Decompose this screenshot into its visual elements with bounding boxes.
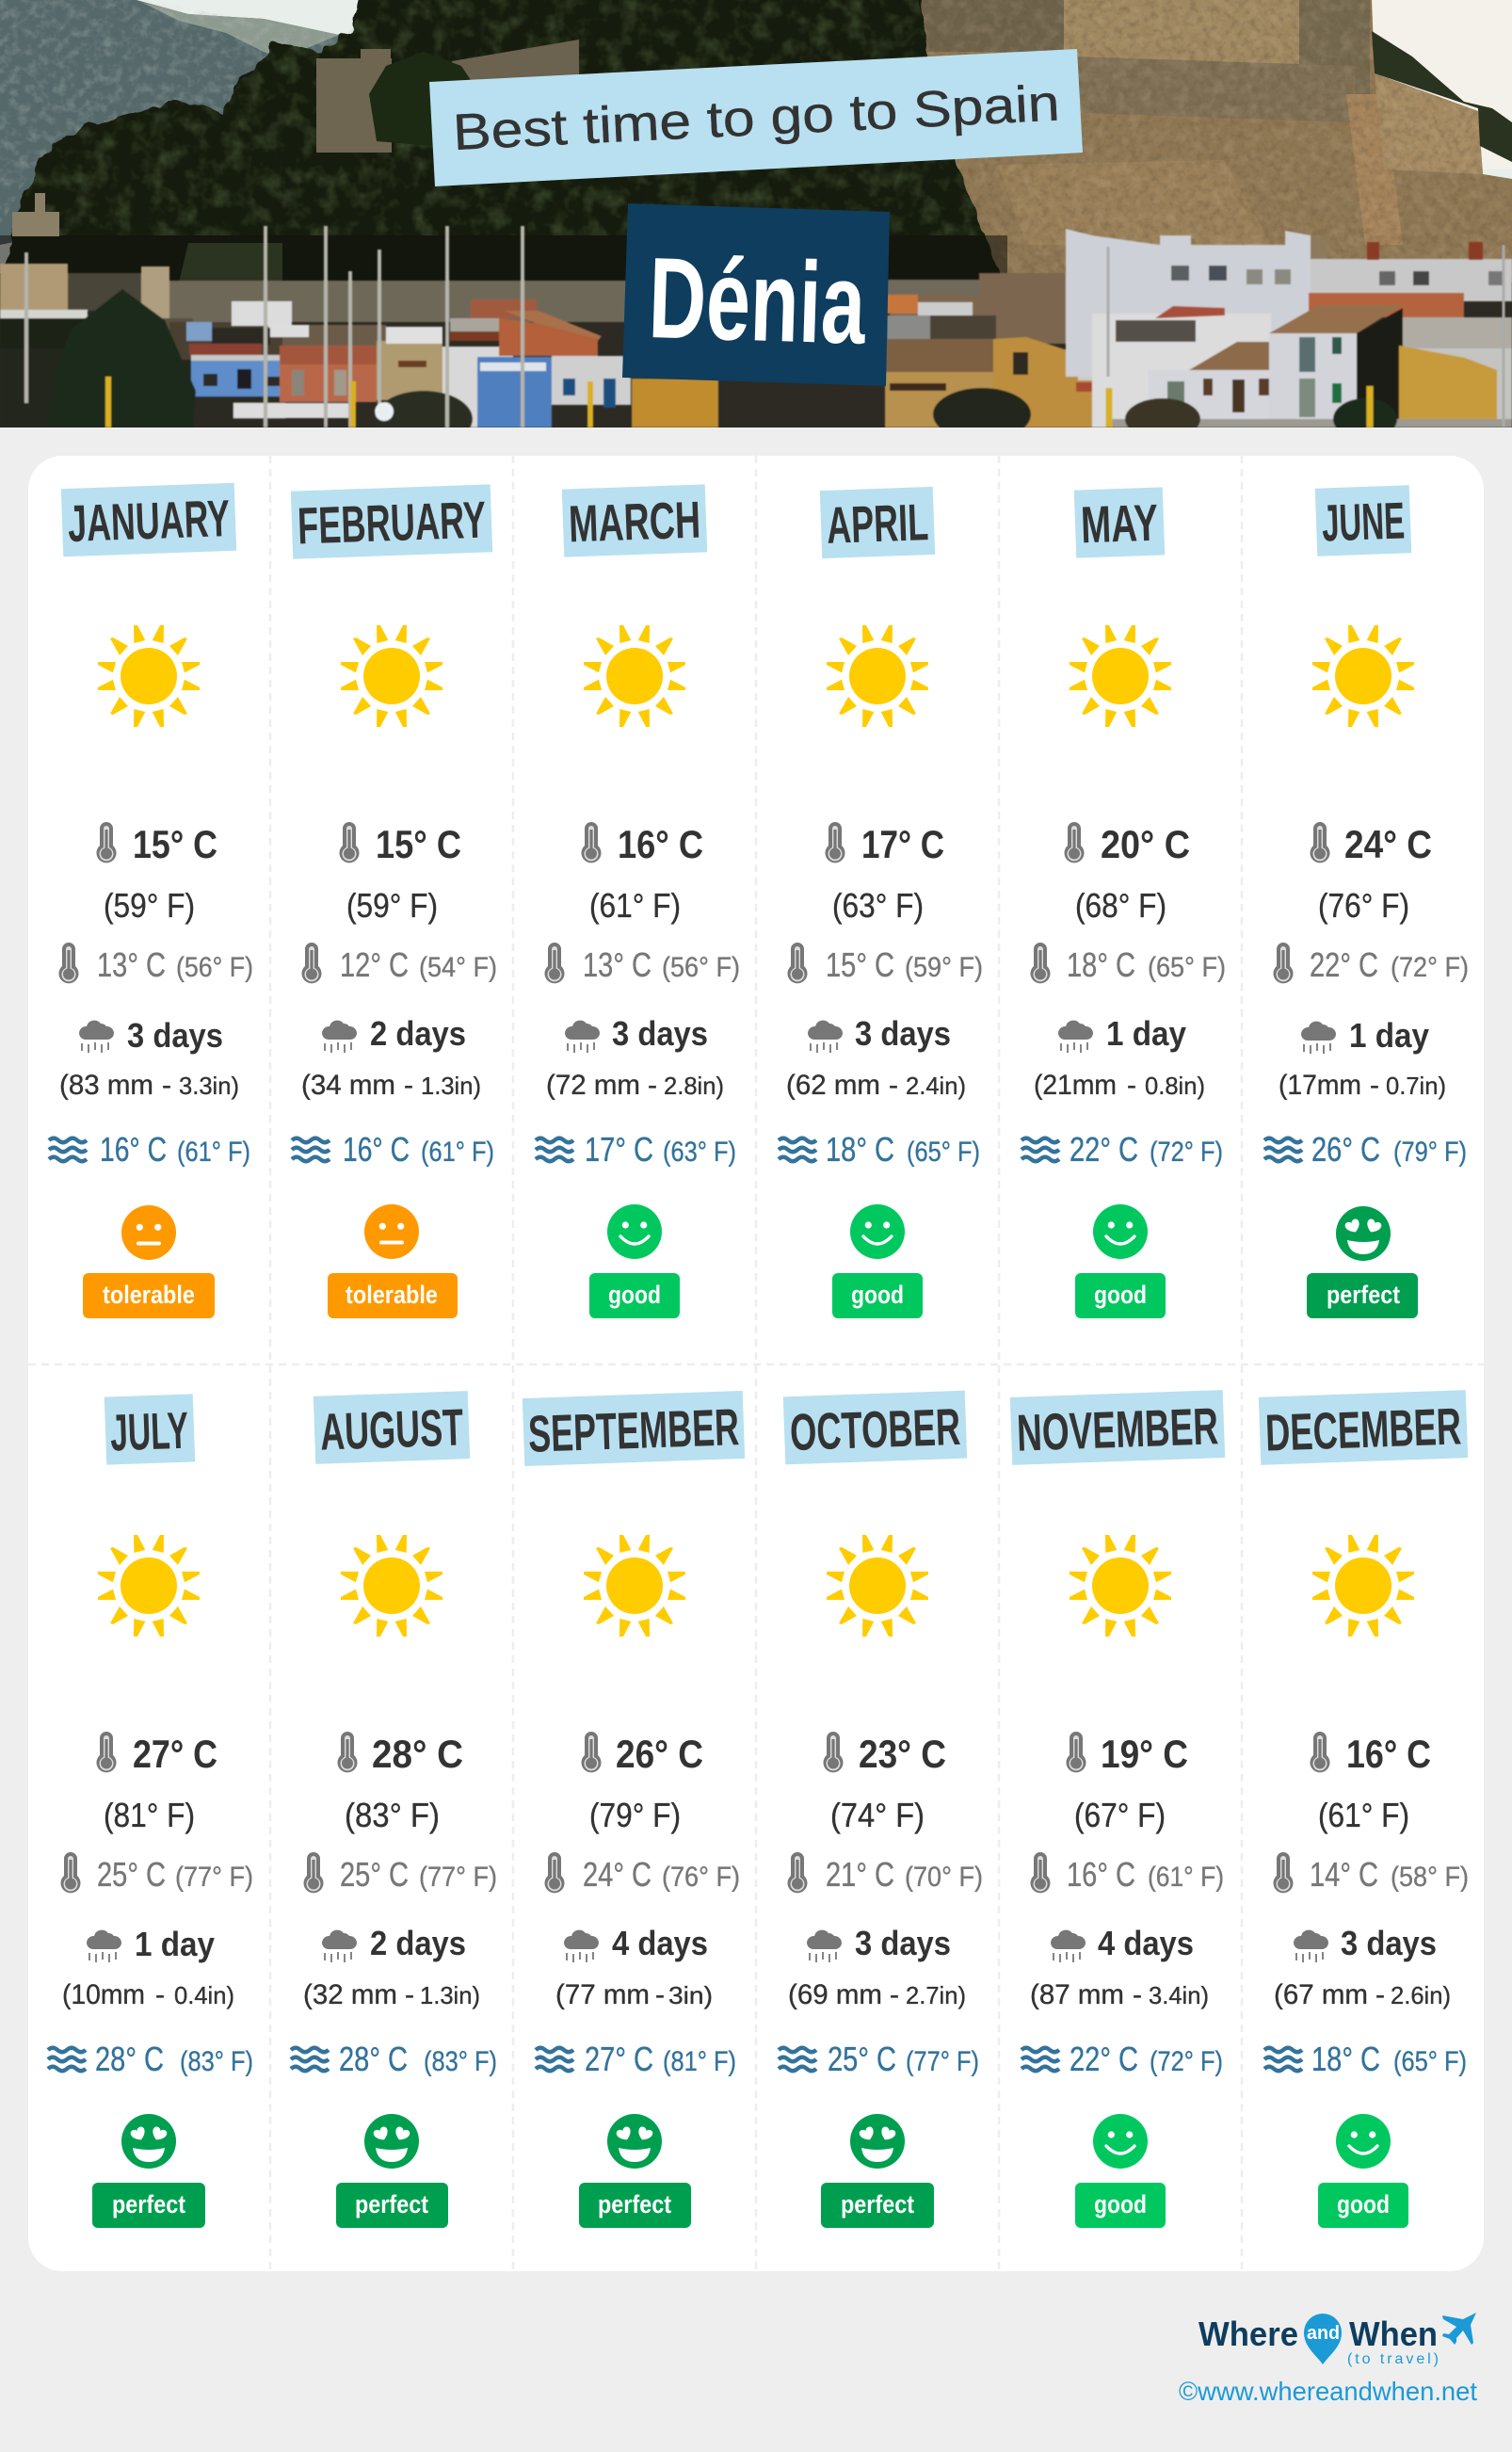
rainy days xyxy=(1294,1924,1437,1962)
rating: tolerable: tolerable xyxy=(103,1281,195,1309)
rainy days xyxy=(807,1924,951,1962)
icon: sun xyxy=(341,1535,442,1637)
sea temperature: (72° F) xyxy=(1150,2046,1223,2077)
rainy days: 3 days xyxy=(855,1014,951,1053)
logo: Where and When: Where xyxy=(1198,2315,1298,2353)
low temperature: (72° F) xyxy=(1391,952,1469,983)
rating: tolerable: tolerable xyxy=(346,1281,438,1309)
high temperature xyxy=(339,822,461,866)
high temperature xyxy=(582,1732,703,1776)
month label xyxy=(1074,487,1165,558)
sea temperature: 16° C xyxy=(100,1130,167,1169)
rainfall: (72 mm xyxy=(546,1070,640,1101)
rainfall: - xyxy=(1127,1070,1136,1101)
sea temperature: 22° C xyxy=(1070,1130,1138,1169)
panel: September xyxy=(523,1391,745,2228)
rainfall: (87 mm xyxy=(1030,1979,1124,2010)
rainfall xyxy=(1274,1979,1451,2010)
month label xyxy=(1315,485,1411,557)
high temperature: 23° C xyxy=(859,1732,946,1776)
rainfall: 2.6in) xyxy=(1391,1981,1451,2009)
rainy days: 3 days xyxy=(855,1924,951,1962)
rainy days: 3 days xyxy=(127,1016,223,1055)
sea temperature xyxy=(1021,2040,1223,2078)
rainfall xyxy=(786,1070,966,1101)
rainfall: 2.7in) xyxy=(906,1981,966,2009)
icon: sun xyxy=(98,1535,200,1637)
month label: SEPTEMBER xyxy=(527,1397,740,1463)
rainfall: - xyxy=(404,1070,413,1101)
sea temperature: 16° C xyxy=(343,1130,410,1169)
rating: good: good xyxy=(851,1281,904,1309)
rainfall xyxy=(301,1070,481,1101)
panel: October xyxy=(779,1391,983,2228)
low temperature: (56° F) xyxy=(176,952,253,983)
sea temperature: (65° F) xyxy=(907,1137,980,1168)
month label: NOVEMBER xyxy=(1016,1396,1219,1462)
sea temperature: (72° F) xyxy=(1150,1137,1223,1168)
sea temperature: (61° F) xyxy=(421,1137,494,1168)
rating: good: good xyxy=(608,1281,661,1309)
rainfall: (69 mm xyxy=(788,1979,882,2010)
low temperature: 16° C xyxy=(1067,1855,1135,1894)
sea temperature xyxy=(1021,1130,1223,1169)
rainfall: - xyxy=(1375,1979,1385,2010)
sea temperature xyxy=(48,2040,253,2078)
low temperature: 18° C xyxy=(1067,945,1135,984)
low temperature xyxy=(301,943,497,984)
rainfall: - xyxy=(162,1070,171,1101)
rainy days xyxy=(1058,1014,1186,1053)
high temperature: 15° C xyxy=(133,822,217,866)
sea temperature xyxy=(291,2040,497,2078)
rainfall: 1.3in) xyxy=(421,1072,481,1100)
city name banner xyxy=(622,203,890,386)
rainfall: - xyxy=(405,1979,414,2010)
low temperature: (77° F) xyxy=(419,1862,497,1893)
rainfall xyxy=(1030,1979,1209,2010)
rainfall: - xyxy=(1133,1979,1142,2010)
sea temperature: (79° F) xyxy=(1393,1137,1467,1168)
rainfall: 0.7in) xyxy=(1386,1072,1446,1100)
low temperature: 15° C xyxy=(826,945,894,984)
month label: AUGUST xyxy=(319,1397,464,1461)
icon: sun xyxy=(827,1535,928,1637)
low temperature: 22° C xyxy=(1310,945,1378,984)
rating: good xyxy=(1075,2114,1166,2228)
low temperature xyxy=(1030,943,1226,984)
rainfall: - xyxy=(890,1979,899,2010)
rating: good xyxy=(832,1204,923,1318)
rainy days: 4 days xyxy=(612,1924,708,1962)
sea temperature: 17° C xyxy=(585,1130,653,1169)
sea temperature: 26° C xyxy=(1311,1130,1380,1169)
rating: good: good xyxy=(1094,2190,1147,2218)
rating: perfect xyxy=(1307,1206,1418,1318)
month label xyxy=(1010,1390,1225,1465)
sea temperature: (83° F) xyxy=(180,2046,253,2077)
castle rock xyxy=(894,0,1512,282)
rainfall: 3in) xyxy=(668,1981,713,2009)
rainfall xyxy=(1034,1070,1205,1101)
sea temperature: 18° C xyxy=(1311,2040,1380,2078)
high temperature fahrenheit: (79° F) xyxy=(589,1796,681,1834)
rainfall: - xyxy=(648,1070,657,1101)
mountain xyxy=(0,0,377,245)
low temperature xyxy=(544,943,740,984)
sea temperature xyxy=(49,1130,250,1169)
rating: tolerable xyxy=(83,1205,215,1318)
title banner: Best time to go to Spain xyxy=(452,75,1061,161)
hero photo: Dénia castle and town xyxy=(0,0,1512,447)
panel: June xyxy=(1264,485,1469,1318)
icon: sun xyxy=(584,1535,685,1637)
panel: August xyxy=(291,1391,497,2228)
month label xyxy=(783,1391,967,1464)
panel: January xyxy=(49,483,253,1318)
rainfall: 0.8in) xyxy=(1145,1072,1205,1100)
rainy days xyxy=(322,1014,466,1053)
month label xyxy=(820,487,935,558)
low temperature xyxy=(787,943,983,984)
sea temperature xyxy=(536,2040,736,2078)
trees xyxy=(0,0,1007,292)
rainfall xyxy=(1279,1070,1446,1101)
panel: March xyxy=(536,484,740,1318)
month label xyxy=(523,1391,745,1466)
rainfall: (21mm xyxy=(1034,1070,1117,1101)
panel: April xyxy=(779,487,983,1318)
high temperature xyxy=(1064,822,1190,866)
high temperature fahrenheit: (63° F) xyxy=(832,886,924,925)
high temperature: 26° C xyxy=(616,1732,703,1776)
rainy days: 1 day xyxy=(1349,1016,1429,1055)
low temperature xyxy=(1273,1852,1469,1894)
panel: May xyxy=(1021,487,1226,1318)
high temperature: 16° C xyxy=(1346,1732,1431,1776)
sea temperature: (63° F) xyxy=(663,1137,736,1168)
icon: sun xyxy=(1312,625,1414,727)
rainfall: 1.3in) xyxy=(420,1981,480,2009)
rating: perfect xyxy=(336,2114,448,2228)
rainfall xyxy=(62,1979,234,2010)
sea temperature: (81° F) xyxy=(663,2046,736,2077)
panel: climate card xyxy=(28,456,1484,2271)
rainy days: 3 days xyxy=(612,1014,708,1053)
logo: Where and When: When xyxy=(1349,2315,1438,2353)
low temperature: 25° C xyxy=(340,1855,409,1894)
rating: perfect: perfect xyxy=(1327,1281,1400,1309)
panel: July xyxy=(48,1394,253,2228)
high temperature fahrenheit: (67° F) xyxy=(1074,1796,1166,1834)
rating: good xyxy=(1075,1204,1166,1318)
icon: sun xyxy=(584,625,685,727)
logo: Where and When xyxy=(1198,2313,1476,2367)
high temperature fahrenheit: (68° F) xyxy=(1075,886,1166,925)
rating: good xyxy=(1318,2114,1408,2228)
rainy days xyxy=(565,1014,708,1053)
sea temperature: 18° C xyxy=(826,1130,894,1169)
month label: FEBRUARY xyxy=(297,491,487,555)
panel: February xyxy=(291,484,497,1318)
low temperature: 12° C xyxy=(340,945,409,984)
rainfall: (83 mm xyxy=(59,1070,153,1101)
rainy days xyxy=(79,1016,223,1055)
sea temperature xyxy=(292,1130,494,1169)
icon: sun xyxy=(827,625,928,727)
sea temperature xyxy=(536,1130,736,1169)
high temperature: 24° C xyxy=(1344,822,1432,866)
low temperature xyxy=(60,1852,253,1894)
month label xyxy=(314,1391,470,1464)
sea temperature xyxy=(1264,1130,1467,1169)
rating: perfect: perfect xyxy=(355,2190,428,2218)
high temperature fahrenheit: (59° F) xyxy=(104,886,195,925)
high temperature xyxy=(1066,1732,1188,1776)
sea temperature: 28° C xyxy=(339,2040,408,2078)
rating: perfect xyxy=(821,2114,934,2228)
title banner xyxy=(429,49,1083,186)
high temperature xyxy=(582,822,703,866)
rainfall xyxy=(59,1070,239,1101)
sea temperature: (83° F) xyxy=(424,2046,497,2077)
high temperature fahrenheit: (59° F) xyxy=(346,886,438,925)
sea temperature xyxy=(779,1130,980,1169)
month label: JANUARY xyxy=(67,489,231,553)
town buildings, left half xyxy=(0,226,718,447)
rainfall xyxy=(546,1070,724,1101)
low temperature: (76° F) xyxy=(662,1862,740,1893)
high temperature: 19° C xyxy=(1101,1732,1188,1776)
month label xyxy=(562,484,707,557)
sea temperature: 25° C xyxy=(828,2040,896,2078)
icon: sun xyxy=(1070,625,1171,727)
month label: JUNE xyxy=(1321,491,1406,553)
high temperature: 15° C xyxy=(376,822,461,866)
rating: perfect: perfect xyxy=(841,2190,914,2218)
rainy days xyxy=(87,1925,215,1963)
high temperature fahrenheit: (76° F) xyxy=(1318,886,1409,925)
high temperature fahrenheit: (61° F) xyxy=(1318,1796,1409,1834)
low temperature: (77° F) xyxy=(175,1862,253,1893)
city name banner: Dénia xyxy=(647,234,868,368)
high temperature fahrenheit: (74° F) xyxy=(830,1796,925,1834)
high temperature xyxy=(1311,1732,1431,1776)
rainy days: 1 day xyxy=(135,1925,215,1963)
rainfall: - xyxy=(655,1979,665,2010)
icon: sun xyxy=(1070,1535,1171,1637)
high temperature xyxy=(96,822,217,866)
high temperature fahrenheit: (61° F) xyxy=(589,886,681,925)
rainfall: (77 mm xyxy=(555,1979,650,2010)
sea temperature: (61° F) xyxy=(177,1137,250,1168)
sea temperature xyxy=(1264,2040,1467,2078)
rainy days: 3 days xyxy=(1341,1924,1437,1962)
rainfall: 2.4in) xyxy=(906,1072,966,1100)
rainfall: (10mm xyxy=(62,1979,145,2010)
rainfall xyxy=(303,1979,480,2010)
rainfall: 0.4in) xyxy=(174,1981,234,2009)
low temperature: 24° C xyxy=(583,1855,651,1894)
panel: December xyxy=(1259,1390,1469,2228)
sea temperature: 27° C xyxy=(585,2040,653,2078)
rainfall: 2.8in) xyxy=(664,1072,724,1100)
low temperature: 21° C xyxy=(826,1855,894,1894)
second row of months xyxy=(48,1390,1469,2228)
icon: sun xyxy=(1312,1535,1414,1637)
rainfall: (34 mm xyxy=(301,1070,395,1101)
icon: sun xyxy=(98,625,200,727)
month label xyxy=(291,484,492,559)
high temperature: 16° C xyxy=(618,822,703,866)
low temperature xyxy=(787,1852,983,1894)
low temperature: 14° C xyxy=(1310,1855,1378,1894)
low temperature: (59° F) xyxy=(905,952,983,983)
month label: OCTOBER xyxy=(789,1397,961,1461)
month label xyxy=(61,483,236,557)
rainfall: - xyxy=(1370,1070,1379,1101)
low temperature: (65° F) xyxy=(1148,952,1226,983)
rating: perfect xyxy=(579,2114,691,2228)
low temperature xyxy=(58,943,253,984)
rainfall: 3.4in) xyxy=(1149,1981,1209,2009)
low temperature xyxy=(1030,1852,1224,1894)
icon: location pin xyxy=(1304,2314,1342,2364)
high temperature xyxy=(96,1732,217,1776)
rainy days: 2 days xyxy=(370,1924,466,1962)
month label: MARCH xyxy=(568,491,701,553)
sea temperature: 22° C xyxy=(1070,2040,1138,2078)
rainfall xyxy=(555,1979,713,2010)
town buildings, right half xyxy=(885,229,1512,441)
rainfall: (32 mm xyxy=(303,1979,397,2010)
rating: good xyxy=(589,1204,680,1318)
rainy days xyxy=(1051,1924,1194,1962)
rating: perfect: perfect xyxy=(598,2190,671,2218)
rainy days: 2 days xyxy=(370,1014,466,1053)
high temperature fahrenheit: (81° F) xyxy=(104,1796,195,1834)
panel: November xyxy=(1010,1390,1225,2228)
low temperature xyxy=(544,1852,740,1894)
low temperature xyxy=(1273,943,1469,984)
low temperature: (61° F) xyxy=(1148,1862,1224,1893)
month label: APRIL xyxy=(826,492,929,555)
website credit: ©www.whereandwhen.net xyxy=(1179,2377,1477,2406)
rainy days: 1 day xyxy=(1106,1014,1186,1053)
rainfall: - xyxy=(155,1979,165,2010)
low temperature: 13° C xyxy=(97,945,166,984)
logo: Where and When: (to travel) xyxy=(1347,2351,1439,2367)
rating: good: good xyxy=(1094,1281,1147,1309)
sea temperature xyxy=(779,2040,979,2078)
month label xyxy=(105,1394,195,1465)
icon: sun xyxy=(341,625,442,727)
high temperature: 28° C xyxy=(372,1732,463,1776)
logo: Where and When: and xyxy=(1307,2323,1340,2344)
low temperature: 13° C xyxy=(583,945,651,984)
high temperature xyxy=(1311,822,1432,866)
low temperature: (70° F) xyxy=(905,1862,983,1893)
rainfall xyxy=(788,1979,966,2010)
low temperature xyxy=(303,1852,497,1894)
low temperature: 25° C xyxy=(97,1855,166,1894)
icon: airplane xyxy=(1442,2313,1476,2345)
sea temperature: 28° C xyxy=(95,2040,164,2078)
rainfall: (67 mm xyxy=(1274,1979,1368,2010)
high temperature xyxy=(337,1732,463,1776)
rating: perfect xyxy=(92,2114,205,2228)
rating: perfect: perfect xyxy=(112,2190,185,2218)
rainfall: (62 mm xyxy=(786,1070,880,1101)
high temperature xyxy=(823,1732,946,1776)
high temperature: 20° C xyxy=(1101,822,1190,866)
rainy days: 4 days xyxy=(1098,1924,1194,1962)
rainy days xyxy=(564,1924,708,1962)
rainfall: 3.3in) xyxy=(179,1072,239,1100)
month label: JULY xyxy=(109,1401,189,1461)
high temperature fahrenheit: (83° F) xyxy=(345,1796,440,1834)
high temperature: 17° C xyxy=(861,822,944,866)
sea temperature: (77° F) xyxy=(906,2046,979,2077)
rainy days xyxy=(808,1014,951,1053)
high temperature xyxy=(825,822,944,866)
rating: good: good xyxy=(1337,2190,1390,2218)
sea temperature: (65° F) xyxy=(1393,2046,1467,2077)
rating: tolerable xyxy=(328,1204,458,1318)
high temperature: 27° C xyxy=(133,1732,217,1776)
low temperature: (58° F) xyxy=(1391,1862,1469,1893)
low temperature: (56° F) xyxy=(662,952,740,983)
rainy days xyxy=(1301,1016,1429,1055)
rainfall: (17mm xyxy=(1279,1070,1361,1101)
rainy days xyxy=(322,1924,466,1962)
rainfall: - xyxy=(889,1070,898,1101)
month label: MAY xyxy=(1080,493,1159,554)
low temperature: (54° F) xyxy=(419,952,497,983)
